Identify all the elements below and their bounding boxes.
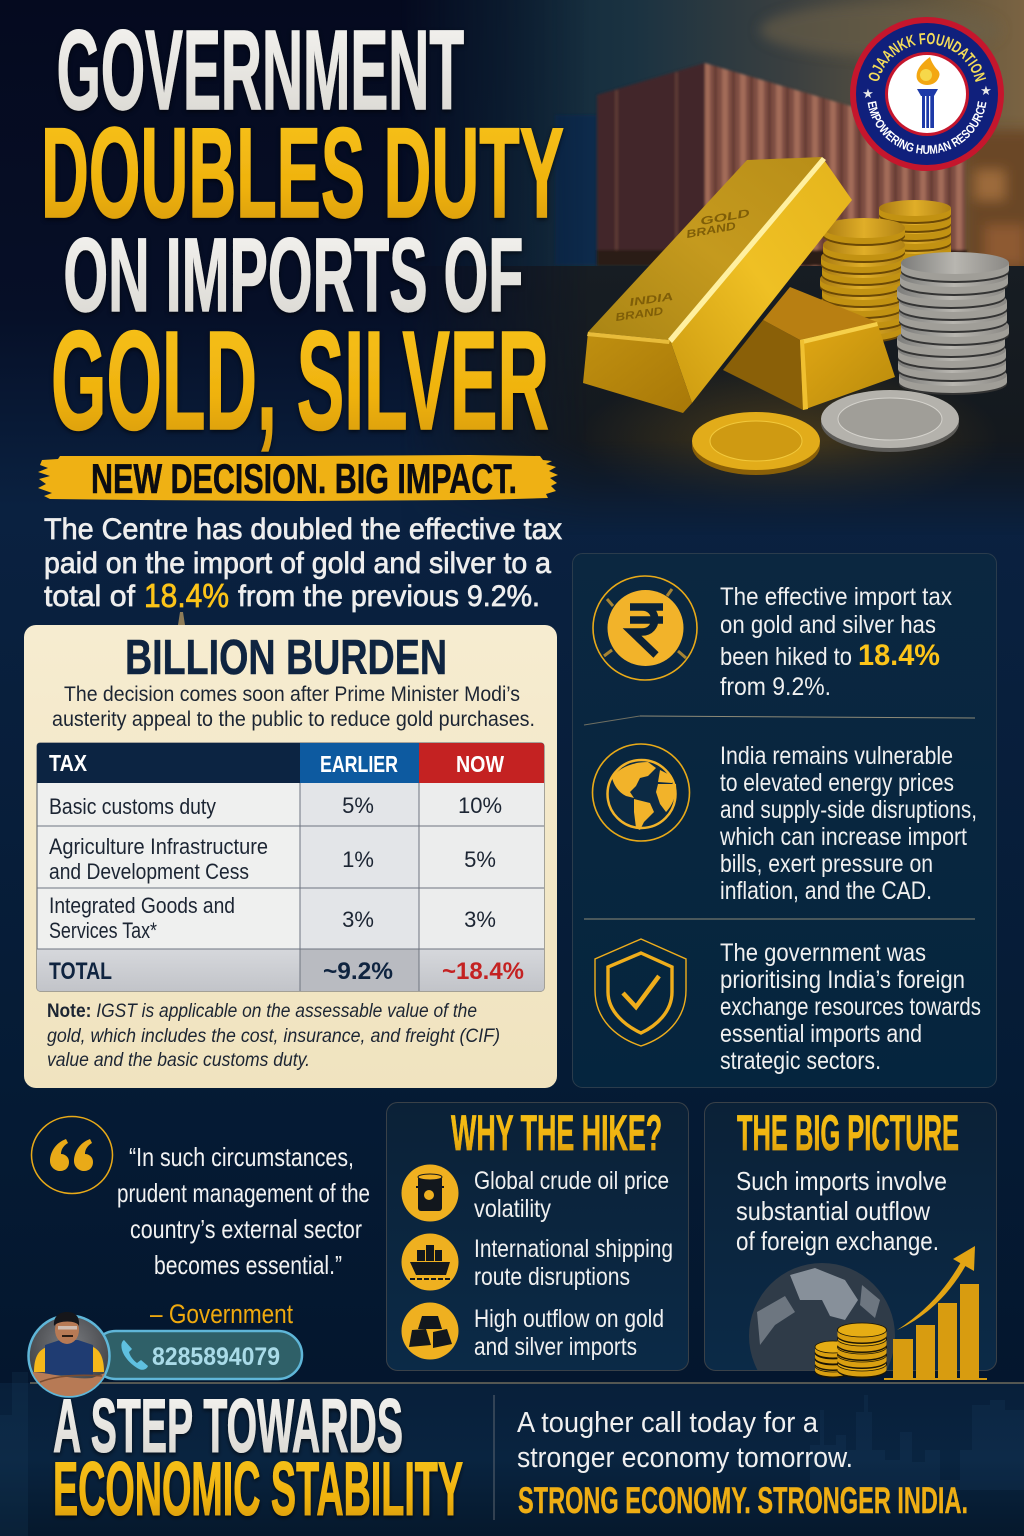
text: crude oil [474, 1167, 669, 1223]
icon: rupee [593, 576, 697, 680]
logo torch [917, 57, 940, 128]
table total: ~9.2% [323, 958, 393, 985]
coin stacks [815, 1323, 886, 1378]
head [55, 1316, 79, 1344]
footer tagline: A tougher call today for a [517, 1407, 819, 1439]
logo text bottom: EMPOWERING HUMAN RESOURCE [868, 101, 986, 154]
text: vulnerability [719, 742, 977, 905]
intro text: The Centre has doubled the effective tax [44, 513, 562, 546]
panel: key facts [572, 554, 996, 1088]
intro text: 18.4% [144, 577, 229, 614]
intro text [44, 513, 562, 614]
table rows: 10% [458, 793, 502, 818]
second gold bar [723, 287, 895, 410]
text: import tax: on gold and silver has [720, 611, 936, 639]
title [41, 7, 564, 459]
gold coin stack rear [879, 200, 951, 262]
logo text top: OJAANKK FOUNDATION [868, 32, 986, 82]
icon: shield [595, 939, 686, 1046]
table total: ~18.4% [442, 958, 524, 985]
quote text: becomes essential.” [154, 1250, 342, 1280]
bar chart [884, 1284, 987, 1380]
panel: billion burden [24, 625, 557, 1088]
table rows: 5% [464, 847, 496, 872]
text: vulnerability: bills, exert pressure on [720, 850, 933, 878]
table rows: Agriculture Infrastructure [49, 834, 268, 859]
text: import tax [720, 583, 952, 701]
text: vulnerability: inflation, and the CAD. [720, 877, 932, 905]
flat silver coin [821, 390, 959, 452]
table total: TOTAL [49, 958, 112, 985]
table total [49, 958, 524, 985]
intro text: total of [44, 580, 136, 613]
quote [32, 1116, 370, 1329]
table note: Note: IGST is applicable on the assessable value of the [47, 1001, 477, 1022]
text: of foreign exchange. [736, 1226, 939, 1256]
photo backdrop [454, 0, 1024, 516]
table rows: 3% [342, 907, 374, 932]
panel subtext [52, 683, 535, 731]
text: shipping: route disruptions [474, 1263, 630, 1291]
quote text: country’s external sector [130, 1214, 362, 1244]
footer heading [53, 1383, 463, 1531]
icon: quote mark [32, 1116, 112, 1194]
panel: the big picture [704, 1102, 996, 1409]
table rows: 3% [464, 907, 496, 932]
silver coin stack [897, 252, 1009, 395]
text: outflow: High outflow on gold [474, 1305, 664, 1333]
table rows: Basic customs duty [49, 794, 216, 819]
bar stamps: BRAND [685, 220, 737, 241]
text: foreign exchange: The government was [720, 939, 926, 967]
text: foreign exchange: prioritising India’s foreign [720, 966, 965, 994]
quote attribution: – Government [150, 1299, 293, 1329]
phone number: 8285894079 [152, 1343, 280, 1371]
text: import tax: The effective import tax [720, 583, 952, 611]
text: crude oil: Global crude oil price [474, 1167, 669, 1195]
table note [47, 1001, 500, 1071]
table header: TAX [49, 750, 88, 776]
logo: Ojaankk Foundation [850, 17, 1004, 171]
text: vulnerability: and supply-side disruptions, [720, 796, 977, 824]
text: vulnerability: India remains vulnerable [720, 742, 953, 770]
table rows: Integrated Goods and [49, 893, 235, 918]
panel subtext: The decision comes soon after Prime Minister Modi’s [64, 683, 520, 706]
table rows: 1% [342, 847, 374, 872]
text: outflow: and silver imports [474, 1333, 637, 1361]
icon: cargo ship [402, 1234, 458, 1290]
skyline [0, 1372, 1024, 1536]
small flame artifact [178, 612, 185, 625]
bar stamps [615, 207, 751, 324]
panel subtext: austerity appeal to the public to reduce gold purchases. [52, 708, 535, 731]
globe graphic [749, 1263, 895, 1370]
intro text: paid on the import of gold and silver to a [44, 547, 551, 580]
text: import tax: 18.4% [858, 639, 940, 672]
quote text: prudent management of the [117, 1178, 370, 1208]
table rows: and Development Cess [49, 859, 249, 884]
text: import tax: from 9.2%. [720, 673, 831, 701]
table rows [49, 793, 502, 943]
text: substantial outflow [736, 1196, 930, 1226]
tax table [37, 743, 544, 991]
icon: oil barrel [402, 1164, 458, 1222]
icon: phone [121, 1340, 148, 1370]
text: vulnerability: which can increase import [719, 823, 967, 851]
table header: EARLIER [320, 751, 398, 777]
icon: globe [592, 744, 690, 841]
table rows: Services Tax* [49, 918, 157, 943]
bar stamps: BRAND [615, 305, 664, 324]
main gold bar [583, 157, 852, 413]
table note: value and the basic customs duty. [47, 1050, 310, 1071]
table header: NOW [456, 751, 504, 777]
logo: Ojaankk Foundation: ★ [980, 83, 992, 98]
flat gold coin [692, 412, 820, 475]
text: import tax: been hiked to [720, 643, 852, 671]
text: foreign exchange [720, 939, 981, 1075]
photo: container, gold bars and coins [454, 0, 1024, 516]
text [736, 1166, 947, 1256]
text: Such imports involve [736, 1166, 947, 1196]
quote text: “In such circumstances, [129, 1142, 354, 1172]
banner: new decision [38, 455, 558, 502]
logo stars: ★ [862, 86, 874, 101]
table rows: 5% [342, 793, 374, 818]
text: shipping [474, 1235, 673, 1291]
phone pill [92, 1331, 302, 1379]
footer band [0, 1372, 1024, 1536]
text: outflow [474, 1305, 664, 1361]
text: vulnerability: to elevated energy prices [720, 769, 954, 797]
torso [32, 1340, 105, 1396]
intro text: from the previous 9.2%. [238, 580, 540, 613]
table note: gold, which includes the cost, insurance, and freight (CIF) [47, 1026, 500, 1047]
growth arrow [897, 1246, 975, 1330]
gold coin stack front [820, 218, 905, 343]
text: foreign exchange: essential imports and [720, 1020, 922, 1048]
footer tagline: stronger economy tomorrow. [517, 1442, 853, 1474]
text: foreign exchange: strategic sectors. [720, 1047, 881, 1075]
portrait avatar [28, 1312, 110, 1400]
text: shipping: International shipping [474, 1235, 673, 1263]
text: crude oil: volatility [474, 1195, 551, 1223]
table header [49, 750, 504, 777]
quote text [117, 1142, 370, 1280]
bar stamps: INDIA [629, 291, 674, 309]
panel: why the hike [386, 1102, 688, 1370]
footer tagline [517, 1407, 853, 1474]
icon: gold bars [402, 1302, 458, 1360]
bar stamps: GOLD [699, 207, 751, 228]
